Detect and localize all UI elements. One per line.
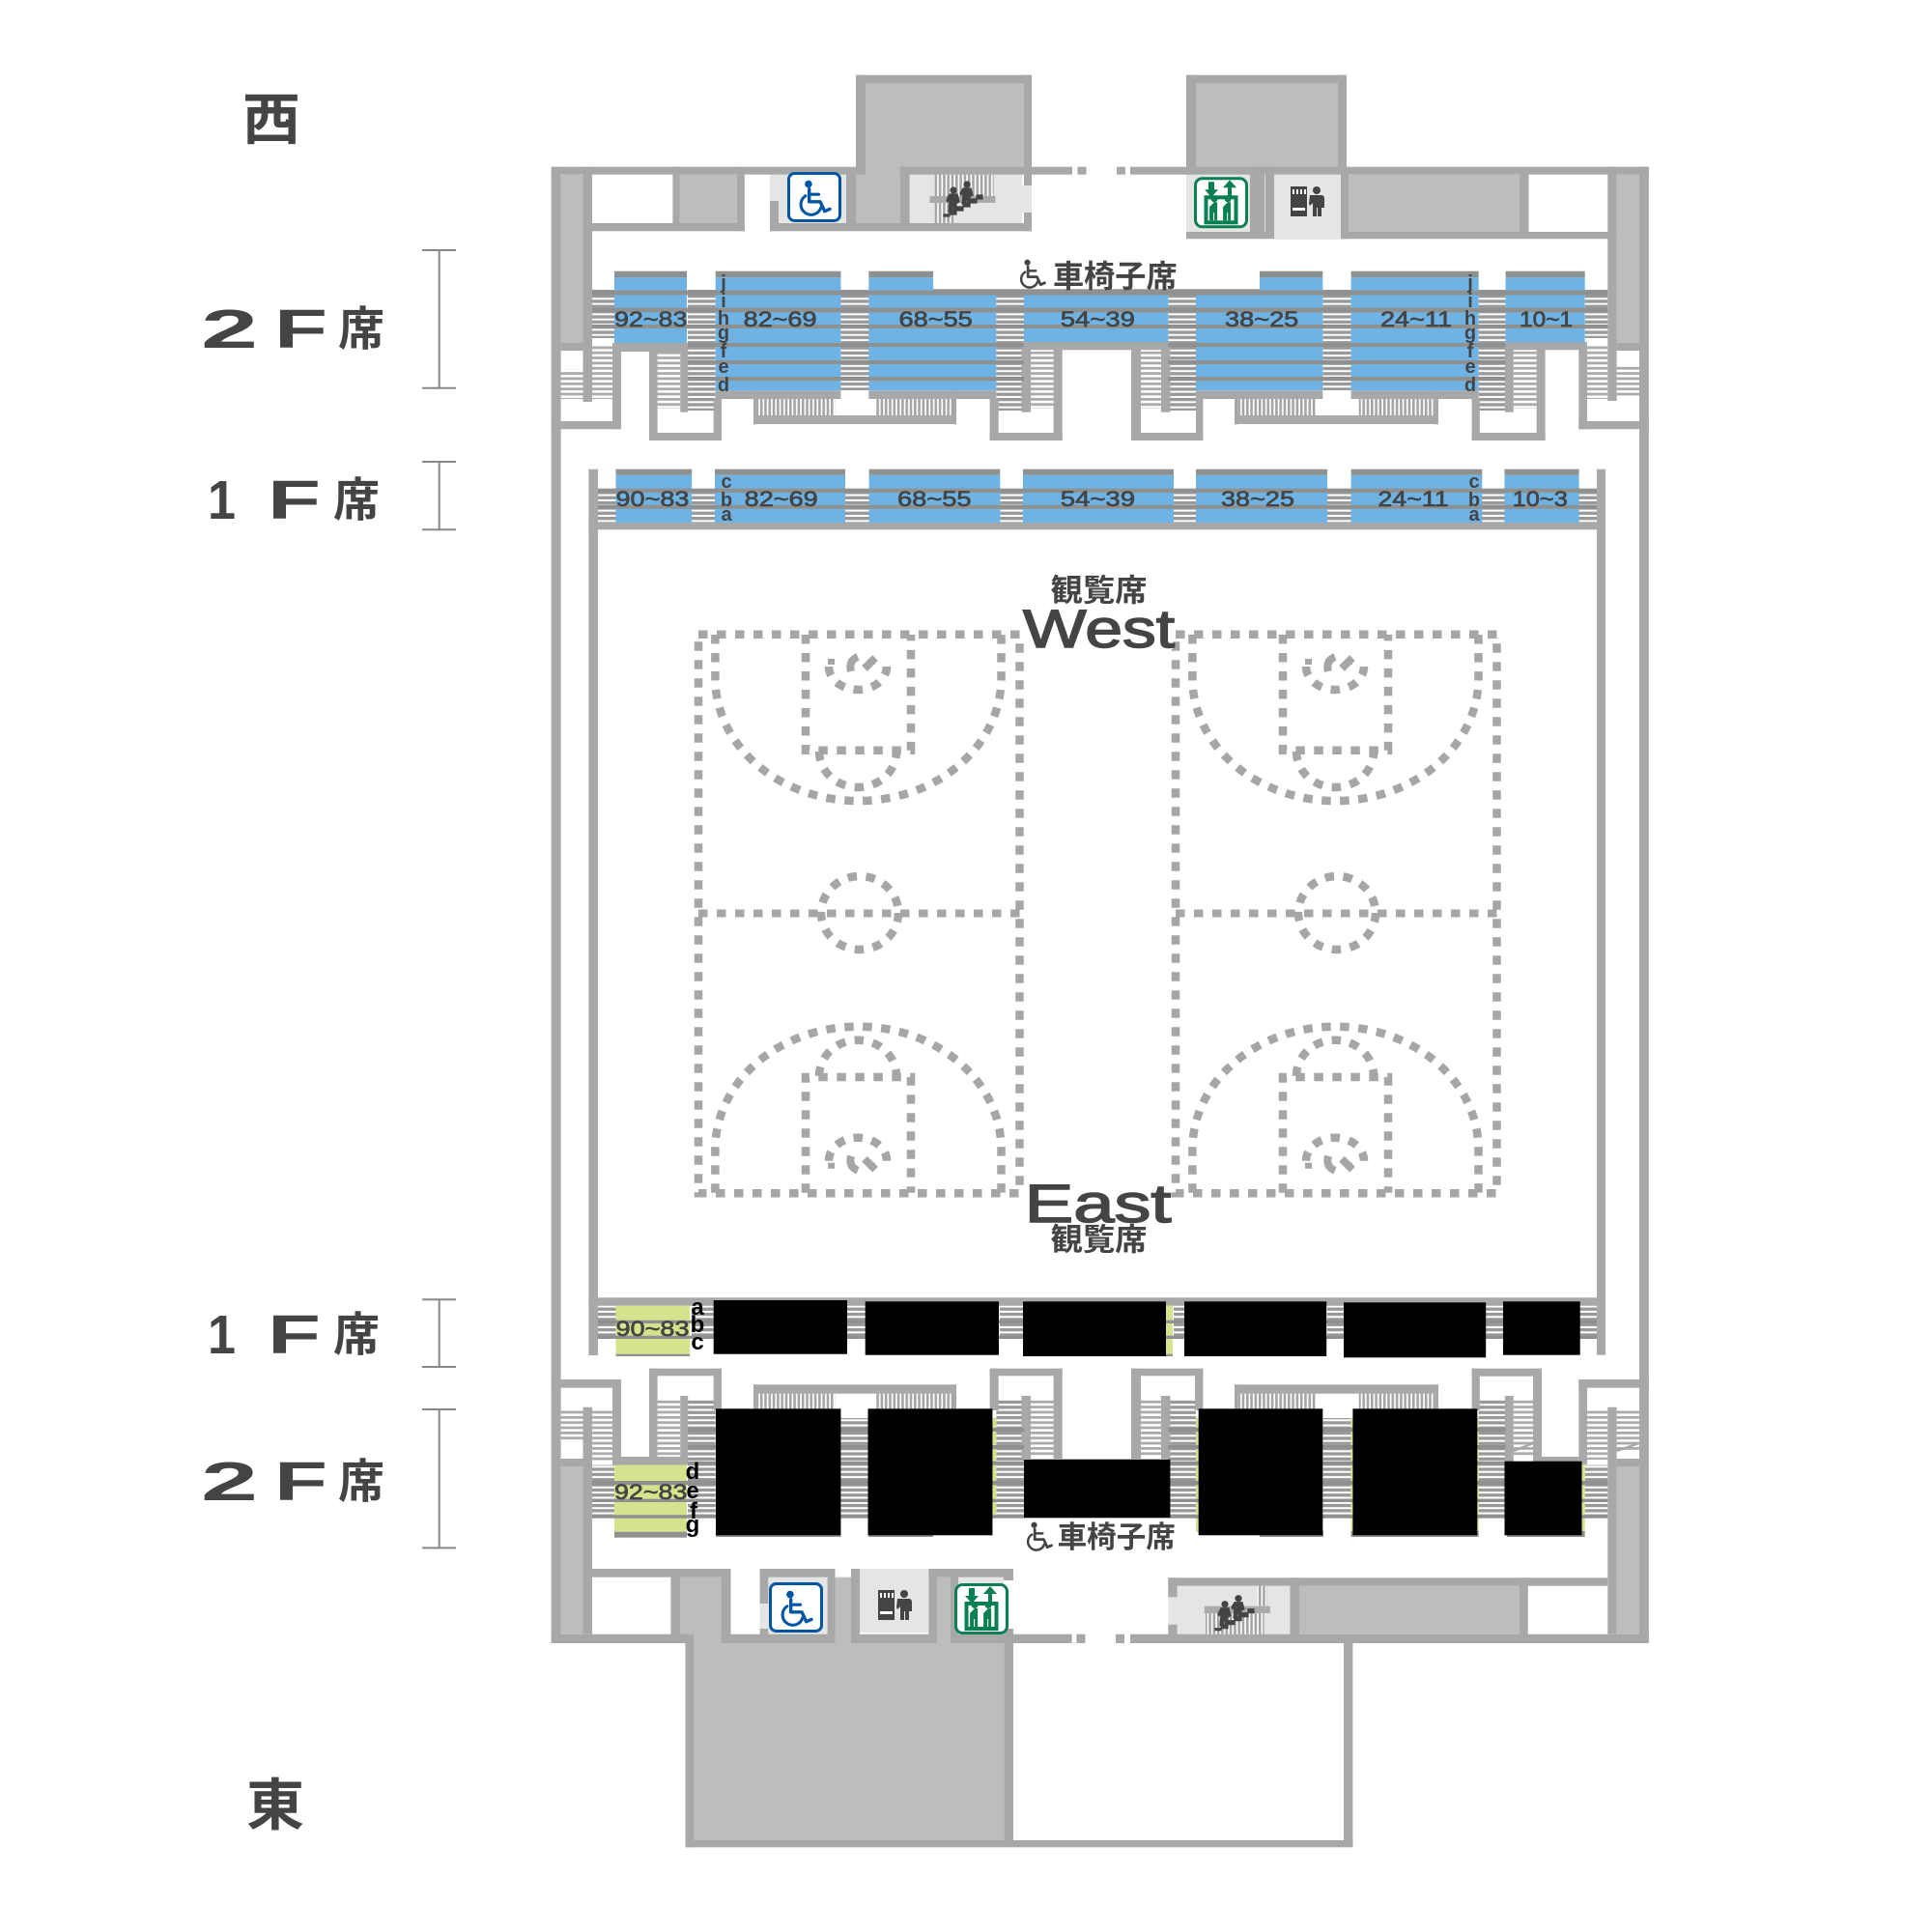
icon: elevator east xyxy=(956,1584,1007,1633)
icon: vending machine east xyxy=(878,1590,912,1620)
seat numbers: west 1F: 68~55 xyxy=(897,487,972,511)
seat numbers and row letters: east 2F: f xyxy=(690,1498,698,1524)
seat numbers and row letters: east 2F: d xyxy=(686,1459,699,1485)
row letters: west 2F right: j xyxy=(1466,272,1473,294)
label: spectator seats west: 観覧席 xyxy=(1051,573,1148,608)
icon: wheelchair restroom west xyxy=(788,174,840,220)
label: east 2F seats: F xyxy=(274,1451,327,1513)
label: east 2F seats xyxy=(201,1451,384,1513)
row letters: west 1F xyxy=(721,471,1480,526)
label: east 1F seats: F xyxy=(268,1304,321,1366)
row letters: west 1F: a xyxy=(1468,504,1480,526)
panel: east 2F seating blocks xyxy=(592,1408,1607,1538)
panel: west 1F seating blocks xyxy=(598,469,1597,523)
seat numbers: west 2F: 24~11 xyxy=(1380,307,1452,331)
label: west 2F seats: 席 xyxy=(338,304,384,355)
seat numbers: west 1F: 54~39 xyxy=(1061,487,1135,511)
row letters: west 2F right xyxy=(1464,272,1476,396)
icon: elevator west xyxy=(1196,179,1246,227)
label: east 1F seats: 席 xyxy=(333,1310,380,1361)
label: wheelchair seats east: 車椅子席 xyxy=(1058,1520,1176,1554)
icon: stairs with people west xyxy=(944,182,982,216)
seat numbers: west 1F xyxy=(616,487,1568,511)
label: west 1F seats: 席 xyxy=(333,475,380,526)
seat numbers: west 2F xyxy=(614,307,1573,331)
seat numbers and row letters: east 2F: g xyxy=(686,1512,699,1538)
seat numbers: west 1F: 10~3 xyxy=(1513,487,1568,511)
seat numbers: west 2F: 10~1 xyxy=(1520,307,1573,331)
seat numbers and row letters: east 2F xyxy=(614,1459,699,1538)
bracket: east 1F range xyxy=(422,1299,456,1367)
chart: left basketball court xyxy=(698,635,1020,1193)
row letters: west 1F: a xyxy=(721,504,732,526)
label: west 2F seats: 2 xyxy=(201,298,258,360)
row letters: west 2F left: g xyxy=(718,323,729,344)
label: spectator seats east: 観覧席 xyxy=(1051,1222,1148,1257)
row letters: west 2F left: i xyxy=(721,291,726,312)
row letters: west 2F right: h xyxy=(1464,308,1476,329)
icon: stairs with people east xyxy=(1215,1596,1254,1631)
row letters: west 1F: c xyxy=(1468,471,1480,493)
seat numbers and row letters: east 2F: e xyxy=(686,1478,699,1504)
label: east 2F seats: 席 xyxy=(338,1457,384,1508)
label: west 2F seats: F xyxy=(274,298,327,360)
label: west 1F seats: F xyxy=(268,469,321,531)
label: wheelchair seats west: 車椅子席 xyxy=(1053,259,1178,294)
seat numbers and row letters: east 1F: a xyxy=(691,1294,704,1321)
seat numbers and row letters: east 1F xyxy=(616,1294,704,1355)
seat numbers: west 1F: 38~25 xyxy=(1221,487,1294,511)
seat numbers and row letters: east 1F: c xyxy=(691,1329,704,1355)
seat numbers: west 1F: 24~11 xyxy=(1378,487,1449,511)
row letters: west 2F right: e xyxy=(1464,356,1476,378)
label: east 1F seats: 1 xyxy=(208,1304,236,1366)
chart: right basketball court xyxy=(1176,635,1497,1193)
panel: stair and aisle stripes xyxy=(561,290,1639,1519)
row letters: west 1F: c xyxy=(721,471,732,493)
label: east 1F seats xyxy=(208,1304,380,1366)
row letters: west 2F left: h xyxy=(718,308,729,329)
seat numbers: west 2F: 68~55 xyxy=(898,307,973,331)
label: spectator seats west: West xyxy=(1023,598,1176,659)
row letters: west 2F right: f xyxy=(1467,341,1474,362)
bracket: west 2F range xyxy=(422,250,456,388)
seat numbers: west 2F: 82~69 xyxy=(744,307,817,331)
seat numbers and row letters: east 1F: b xyxy=(691,1312,704,1338)
label: spectator seats west xyxy=(1023,573,1176,659)
label: spectator seats east xyxy=(1025,1173,1172,1257)
label: west 1F seats xyxy=(208,469,380,531)
row letters: west 2F right: d xyxy=(1464,375,1476,396)
row letters: west 1F: b xyxy=(1468,490,1480,511)
panel: west 2F seating blocks xyxy=(592,271,1607,390)
row letters: west 2F left: j xyxy=(720,272,726,294)
row letters: west 1F: b xyxy=(721,490,732,511)
icon: wheelchair restroom east xyxy=(771,1584,821,1631)
seat numbers: west 2F: 38~25 xyxy=(1225,307,1298,331)
panel: building shell walls and rooms xyxy=(552,75,1649,1847)
bracket: east 2F range xyxy=(422,1409,456,1548)
row letters: west 2F left: e xyxy=(718,356,729,378)
label: east direction: 東 xyxy=(246,1775,304,1837)
label: east 2F seats: 2 xyxy=(201,1451,258,1513)
icon: vending machine west xyxy=(1291,186,1324,216)
seat numbers: west 2F: 92~83 xyxy=(614,307,687,331)
row letters: west 2F left: d xyxy=(718,375,729,396)
bracket: west 1F range xyxy=(422,462,456,529)
seat numbers and row letters: east 2F: 92~83 xyxy=(614,1480,687,1504)
label: west direction: 西 xyxy=(242,89,300,152)
row letters: west 2F right: i xyxy=(1467,291,1473,312)
seat numbers: west 1F: 90~83 xyxy=(616,487,689,511)
row letters: west 2F left: f xyxy=(721,341,727,362)
row letters: west 2F right: g xyxy=(1464,323,1476,344)
seat numbers and row letters: east 1F: 90~83 xyxy=(616,1317,690,1341)
seat numbers: west 2F: 54~39 xyxy=(1061,307,1135,331)
panel: east 1F seating blocks xyxy=(598,1300,1597,1357)
label: west 1F seats: 1 xyxy=(208,469,236,531)
row letters: west 2F left xyxy=(718,272,729,396)
label: west 2F seats xyxy=(201,298,384,360)
seat numbers: west 1F: 82~69 xyxy=(745,487,818,511)
label: spectator seats east: East xyxy=(1025,1173,1172,1234)
